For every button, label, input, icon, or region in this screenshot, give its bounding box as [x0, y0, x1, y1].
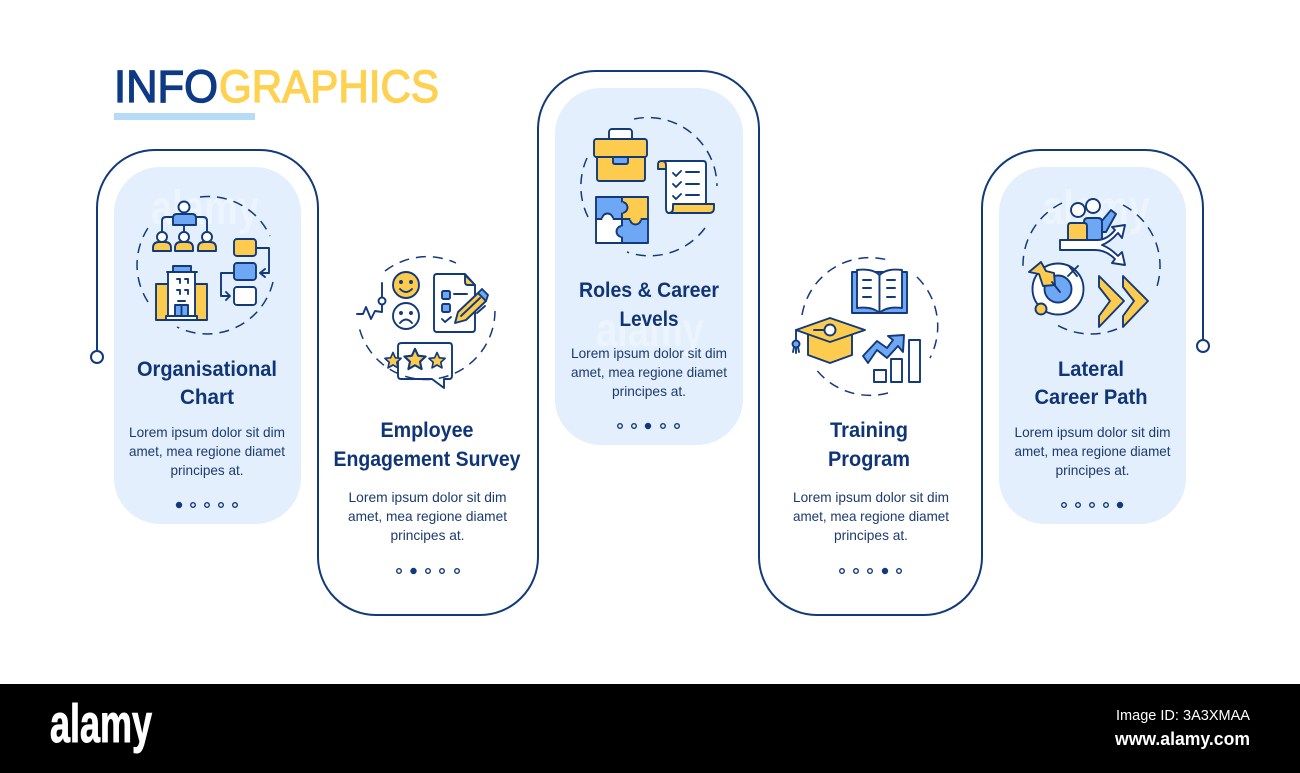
icon: book, graduation cap and growth chart [792, 258, 938, 395]
title: INFO [114, 61, 218, 112]
heading line 2: Program [828, 447, 910, 471]
heading line 2: Engagement Survey [334, 447, 521, 471]
panel: roles and career levels [571, 118, 727, 428]
text block [1014, 424, 1171, 478]
pagination dots [397, 568, 459, 574]
pagination dots [618, 424, 679, 428]
pagination dots [176, 502, 237, 508]
title [114, 61, 439, 120]
text block: principes at. [390, 527, 464, 543]
watermarks: alamy [596, 304, 704, 357]
connecting outline [91, 71, 1209, 615]
text block: amet, mea regione diamet [129, 443, 285, 459]
icon: survey feedback [357, 257, 495, 388]
text block: Lorem ipsum dolor sit dim [129, 424, 285, 440]
watermarks: alamy [151, 182, 259, 235]
text block: principes at. [1056, 462, 1130, 478]
icon: organisation chart and building [137, 196, 273, 334]
text block [129, 424, 285, 478]
text block: principes at. [612, 383, 686, 399]
icon: people, target and chevrons [1023, 199, 1160, 334]
text block: principes at. [834, 527, 908, 543]
footer image id: Image ID: 3A3XMAA [1116, 707, 1250, 724]
panel: organisational chart [129, 196, 285, 508]
heading: Employee [380, 418, 474, 442]
text block: Lorem ipsum dolor sit dim [1014, 424, 1170, 440]
watermarks [151, 182, 1150, 357]
panel: training program [792, 258, 949, 574]
footer bar [0, 684, 1300, 773]
title: GRAPHICS [219, 61, 439, 112]
heading line 2: Career Path [1034, 385, 1148, 409]
footer url: www.alamy.com [1114, 729, 1250, 749]
panel backgrounds [114, 88, 1186, 524]
heading: Lateral [1058, 357, 1124, 381]
text block: amet, mea regione diamet [793, 508, 949, 524]
watermarks: alamy [1042, 182, 1150, 235]
heading: Roles & Career [579, 278, 720, 302]
text block: principes at. [170, 462, 244, 478]
heading line 2: Levels [620, 307, 679, 331]
pagination dots [1062, 502, 1122, 508]
text block [348, 489, 507, 543]
text block [793, 489, 949, 543]
panel: lateral career path [1014, 199, 1171, 508]
footer logo: alamy [50, 694, 152, 754]
panel: employee engagement survey [334, 257, 521, 574]
text block: Lorem ipsum dolor sit dim [348, 489, 506, 505]
text block: amet, mea regione diamet [1014, 443, 1171, 459]
text block [571, 345, 727, 399]
heading line 2: Chart [180, 385, 234, 409]
heading: Training [830, 418, 908, 442]
heading: Organisational [137, 357, 277, 381]
text block: Lorem ipsum dolor sit dim [793, 489, 949, 505]
text block: Lorem ipsum dolor sit dim [571, 345, 727, 361]
icon: briefcase, checklist and puzzle [581, 118, 717, 256]
text block: amet, mea regione diamet [571, 364, 727, 380]
text block: amet, mea regione diamet [348, 508, 507, 524]
pagination dots [840, 568, 901, 574]
